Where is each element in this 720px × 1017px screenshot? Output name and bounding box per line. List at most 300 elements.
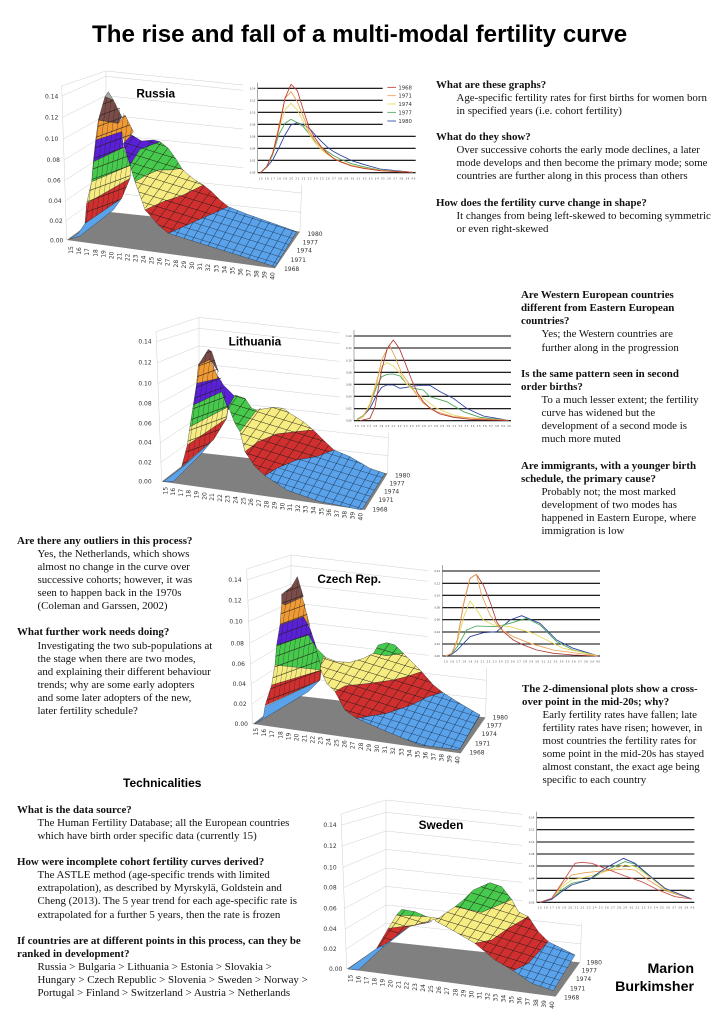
y axis labels: 0.04 xyxy=(233,681,246,688)
age axis labels: 17 xyxy=(363,976,370,984)
inset line chart: 0.02 xyxy=(434,642,440,646)
age axis labels: 31 xyxy=(382,746,389,753)
year axis labels xyxy=(564,959,602,1001)
chart: Russia xyxy=(45,71,417,280)
text block: western vs eastern Europe: immigration is low xyxy=(542,525,624,537)
inset line chart: 0.12 xyxy=(250,98,256,102)
inset line chart: 0.12 xyxy=(346,346,352,350)
text block: outliers and further work: and some later adopters of the new, xyxy=(38,692,191,704)
age axis labels: 30 xyxy=(189,262,196,269)
text block: technicalities xyxy=(17,804,308,999)
inset line chart: 0.10 xyxy=(346,358,352,362)
age axis labels: 24 xyxy=(141,255,148,263)
y axis labels: 0.14 xyxy=(323,822,337,829)
text block: what are these graphs: in specified years (i.e. cohort fertility) xyxy=(456,105,622,117)
age axis labels: 37 xyxy=(430,753,437,760)
age axis labels: 22 xyxy=(404,982,411,989)
inset line chart: 15 16 17 18 19 20 21 22 23 24 25 26 27 28 29 30 31 32 33 34 35 36 37 38 39 40 xyxy=(538,906,695,910)
inset line chart: 0.14 xyxy=(529,816,535,820)
year axis labels: 1974 xyxy=(297,248,312,255)
year axis labels: 1977 xyxy=(303,239,318,246)
legend: 1971 xyxy=(398,94,412,100)
inset line chart: 0.10 xyxy=(529,840,535,844)
y axis labels: 0.04 xyxy=(323,926,337,933)
year axis labels: 1977 xyxy=(487,722,502,729)
y axis labels: 0.08 xyxy=(47,157,60,164)
age axis labels: 27 xyxy=(444,987,451,995)
text block: what are these graphs: What are these graphs? xyxy=(436,78,546,90)
age axis labels: 22 xyxy=(309,736,316,743)
chart: Lithuania xyxy=(138,317,513,520)
age axis labels: 32 xyxy=(390,747,397,755)
floor xyxy=(253,695,486,753)
age axis labels: 35 xyxy=(318,507,325,515)
y axis labels: 0.06 xyxy=(232,661,245,668)
age axis labels: 35 xyxy=(509,996,516,1003)
country label: Czech Rep. xyxy=(317,572,381,586)
age axis labels: 28 xyxy=(264,500,271,508)
inset line chart: 0.08 xyxy=(434,606,440,610)
text block: cross-over point: The 2-dimensional plots show a cross- xyxy=(522,682,698,694)
age axis labels: 20 xyxy=(108,251,115,259)
age axis labels xyxy=(347,974,556,1009)
age axis labels: 21 xyxy=(396,981,403,988)
surface: Russia xyxy=(69,92,297,267)
age axis labels: 38 xyxy=(533,999,540,1007)
y axis labels: 0.00 xyxy=(235,721,248,728)
age axis labels: 16 xyxy=(261,729,268,736)
age axis labels: 18 xyxy=(277,731,284,739)
age axis labels: 36 xyxy=(422,751,429,759)
year axis labels: 1971 xyxy=(291,257,306,264)
text block: technicalities: extrapolated for a further 5 years, then the rate is frozen xyxy=(38,908,280,920)
text block: cross-over point: most countries the fertility rates for xyxy=(542,735,696,747)
year axis labels: 1977 xyxy=(582,967,597,974)
year axis labels: 1974 xyxy=(482,731,497,738)
age axis labels: 36 xyxy=(237,268,244,276)
text block: western vs eastern Europe: countries? xyxy=(521,315,569,327)
year axis labels: 1971 xyxy=(570,985,585,992)
age axis labels: 23 xyxy=(133,254,140,262)
inset line chart: 0.14 xyxy=(250,86,256,90)
age axis labels: 28 xyxy=(452,988,459,996)
inset line chart xyxy=(340,328,513,432)
inset line chart xyxy=(428,564,602,668)
age axis labels: 21 xyxy=(209,493,216,501)
inset line chart: 15 16 17 18 19 20 21 22 23 24 25 26 27 28 29 30 31 32 33 34 35 36 37 38 39 40 xyxy=(259,176,416,180)
country label: Russia xyxy=(136,87,176,101)
text block: technicalities: If countries are at different points in this process, can they be xyxy=(17,935,301,947)
inset line chart: 0.04 xyxy=(434,630,440,634)
y axis labels: 0.12 xyxy=(45,115,59,122)
text block: cross-over point: fertility rates have risen; however, in xyxy=(542,722,702,734)
title: The rise and fall of a multi-modal fertility curve xyxy=(92,21,627,48)
text block: western vs eastern Europe: curve has widened but the xyxy=(542,407,655,419)
age axis labels: 34 xyxy=(221,266,228,273)
text block: outliers and further work: Investigating the two sub-populations at xyxy=(38,640,212,652)
inset line chart: 0.00 xyxy=(346,419,352,423)
text block: cross-over point xyxy=(522,682,704,786)
text block: western vs eastern Europe: development of a second mode is xyxy=(542,420,687,432)
year axis labels: 1974 xyxy=(576,976,591,983)
age axis labels: 27 xyxy=(165,258,172,266)
text block: cross-over point: Early fertility rates have fallen; late xyxy=(542,709,697,721)
age axis labels: 31 xyxy=(197,263,204,270)
year axis labels: 1971 xyxy=(378,497,394,504)
age axis labels: 17 xyxy=(178,489,185,496)
text block: technicalities: The Human Fertility Database; all the European countries xyxy=(38,817,289,829)
age axis labels: 18 xyxy=(92,249,99,257)
text block: western vs eastern Europe: much more muted xyxy=(542,433,621,445)
text block: technicalities: What is the data source? xyxy=(17,804,132,816)
y axis labels: 0.06 xyxy=(323,905,337,912)
age axis labels: 33 xyxy=(398,748,405,756)
age axis labels: 40 xyxy=(357,513,364,520)
inset line chart: 0.04 xyxy=(346,394,352,398)
text block: technicalities: ranked in development? xyxy=(17,948,130,960)
age axis labels: 18 xyxy=(372,978,379,985)
age axis labels: 34 xyxy=(501,995,508,1002)
age axis labels: 20 xyxy=(293,733,300,741)
legend: 1974 xyxy=(398,102,412,108)
year axis labels: 1977 xyxy=(389,480,405,487)
age axis labels: 19 xyxy=(380,979,387,986)
inset line chart: 0.06 xyxy=(529,864,535,868)
age axis labels: 39 xyxy=(350,512,357,519)
age axis labels: 22 xyxy=(217,494,224,502)
age axis labels: 15 xyxy=(347,974,354,982)
inset line chart xyxy=(243,81,417,185)
legend: 1980 xyxy=(398,119,412,125)
age axis labels: 31 xyxy=(287,503,294,511)
age axis labels: 21 xyxy=(116,252,123,260)
text block: technicalities: which have birth order specific data (currently 15) xyxy=(38,830,257,842)
inset line chart: 0.14 xyxy=(346,334,352,338)
age axis labels: 15 xyxy=(162,487,169,494)
y axis labels: 0.10 xyxy=(45,136,59,143)
text block: what are these graphs xyxy=(436,78,711,235)
inset line chart: 0.10 xyxy=(250,110,256,114)
inset line chart: 15 16 17 18 19 20 21 22 23 24 25 26 27 28 29 30 31 32 33 34 35 36 37 38 39 40 xyxy=(444,659,600,663)
inset line chart: 0.04 xyxy=(529,876,535,880)
text block: what are these graphs: Age-specific fertility rates for first births for women born xyxy=(456,92,707,104)
text block: technicalities: Russia > Bulgaria > Lithuania > Estonia > Slovakia > xyxy=(38,961,272,973)
age axis labels: 27 xyxy=(256,499,263,507)
age axis labels: 30 xyxy=(468,990,475,998)
country label: Sweden xyxy=(419,818,463,832)
y axis labels xyxy=(45,94,64,245)
age axis labels: 29 xyxy=(460,989,467,997)
age axis labels: 34 xyxy=(311,506,318,514)
text block: cross-over point: specific to each country xyxy=(542,774,646,786)
text block: outliers and further work: seen to happen back in the 1970s xyxy=(38,587,181,599)
year axis labels xyxy=(372,472,410,513)
age axis labels: 17 xyxy=(84,248,91,256)
age axis labels: 16 xyxy=(76,247,83,255)
age axis labels: 26 xyxy=(342,740,349,748)
y axis labels: 0.00 xyxy=(50,238,64,245)
age axis labels: 28 xyxy=(173,260,180,267)
age axis labels: 40 xyxy=(270,272,277,280)
age axis labels: 32 xyxy=(484,992,491,1000)
year axis labels: 1980 xyxy=(493,714,508,721)
legend: 1968 xyxy=(398,85,412,91)
age axis labels: 29 xyxy=(272,501,279,509)
text block: what are these graphs: countries are further along in this process than others xyxy=(456,170,688,182)
text block: outliers and further work: Are there any outliers in this process? xyxy=(17,534,192,546)
y axis labels: 0.02 xyxy=(323,946,337,953)
text block: technicalities: How were incomplete cohort fertility curves derived? xyxy=(17,856,264,868)
inset line chart: 0.02 xyxy=(346,407,352,411)
text block: outliers and further work: What further work needs doing? xyxy=(17,626,169,638)
text block: outliers and further work: later fertility schedule? xyxy=(38,705,138,717)
text block: western vs eastern Europe: Is the same pattern seen in second xyxy=(521,368,679,380)
text block: what are these graphs: How does the fertility curve change in shape? xyxy=(436,197,647,209)
text block: western vs eastern Europe: schedule, the primary cause? xyxy=(521,473,656,485)
age axis labels: 38 xyxy=(254,270,261,278)
y axis labels: 0.02 xyxy=(233,701,247,708)
text block: western vs eastern Europe: To a much lesser extent; the fertility xyxy=(542,394,699,406)
year axis labels xyxy=(469,714,508,756)
text block: western vs eastern Europe: Probably not; the most marked xyxy=(542,486,676,498)
year axis labels: 1974 xyxy=(384,489,399,496)
y axis labels: 0.08 xyxy=(231,640,244,647)
inset line chart: 0.12 xyxy=(529,828,535,832)
age axis labels: 24 xyxy=(326,738,333,746)
age axis labels: 38 xyxy=(342,511,349,518)
legend: 1977 xyxy=(398,110,412,116)
age axis labels: 40 xyxy=(549,1001,556,1009)
y axis labels: 0.02 xyxy=(138,459,152,466)
age axis labels: 23 xyxy=(412,983,419,991)
y axis labels: 0.06 xyxy=(47,178,61,185)
text block: western vs eastern Europe: Are Western European countries xyxy=(521,289,674,301)
text block: outliers and further work: Yes, the Netherlands, which shows xyxy=(38,548,189,560)
year axis labels xyxy=(284,231,323,273)
age axis labels: 30 xyxy=(279,502,286,510)
y axis labels xyxy=(138,339,152,486)
y axis labels: 0.14 xyxy=(138,339,152,346)
age axis labels: 30 xyxy=(374,745,381,752)
y axis labels: 0.14 xyxy=(45,94,59,101)
inset line chart: 0.14 xyxy=(434,569,440,573)
year axis labels: 1968 xyxy=(469,749,485,756)
text block: western vs eastern Europe: Are immigrants, with a younger birth xyxy=(521,460,696,472)
y axis labels: 0.10 xyxy=(229,619,243,626)
text block: outliers and further work xyxy=(17,534,212,717)
age axis labels: 23 xyxy=(318,737,325,744)
year axis labels: 1971 xyxy=(475,740,490,747)
age axis labels: 36 xyxy=(517,997,524,1004)
age axis labels: 31 xyxy=(476,991,483,999)
text block: cross-over point: almost constant, the exact age being xyxy=(542,761,700,773)
floor xyxy=(347,942,580,997)
legend xyxy=(387,85,412,125)
age axis labels: 15 xyxy=(68,246,75,254)
age axis labels: 25 xyxy=(428,985,435,993)
age axis labels: 21 xyxy=(301,734,308,742)
floor xyxy=(67,212,300,268)
age axis labels: 35 xyxy=(229,267,236,274)
age axis labels: 25 xyxy=(240,497,247,505)
chart: Czech Rep. xyxy=(228,555,602,764)
age axis labels: 39 xyxy=(447,755,454,763)
floor xyxy=(162,453,388,510)
inset line chart: 0.06 xyxy=(434,618,440,622)
text block: western vs eastern Europe: order births? xyxy=(521,381,583,393)
age axis labels xyxy=(162,487,364,520)
age axis labels: 26 xyxy=(157,257,164,265)
inset line chart: 0.02 xyxy=(250,158,256,162)
heading: technicalities: Technicalities xyxy=(123,776,201,790)
year axis labels: 1980 xyxy=(395,472,410,479)
y axis labels xyxy=(228,577,248,728)
y axis labels: 0.12 xyxy=(323,843,337,850)
country label: Lithuania xyxy=(229,335,282,349)
text block: what are these graphs: mode develops and then become the primary mode; some xyxy=(456,157,708,169)
y axis labels: 0.14 xyxy=(228,577,242,584)
y axis labels: 0.00 xyxy=(138,479,152,486)
surface: Sweden xyxy=(348,883,575,991)
text block: western vs eastern Europe: development of two modes has xyxy=(542,499,677,511)
age axis labels: 26 xyxy=(248,498,255,506)
surface: Lithuania xyxy=(163,349,385,510)
y axis labels: 0.12 xyxy=(228,598,242,605)
inset line chart: 0.08 xyxy=(346,370,352,374)
y axis labels xyxy=(323,822,343,973)
inset line chart: 0.06 xyxy=(250,134,256,138)
inset line chart: 0.00 xyxy=(434,654,440,658)
text block: western vs eastern Europe: Yes; the Western countries are xyxy=(542,328,673,340)
text block: outliers and further work: successive cohorts; however, it was xyxy=(38,574,192,586)
author name: Marion xyxy=(647,961,694,977)
age axis labels: 26 xyxy=(436,986,443,994)
age axis labels: 19 xyxy=(285,732,292,740)
age axis labels: 29 xyxy=(366,744,373,751)
text block: western vs eastern Europe: further along in the progression xyxy=(542,342,679,354)
text block: what are these graphs: What do they show? xyxy=(436,131,531,143)
age axis labels: 34 xyxy=(406,749,413,757)
inset line chart: 0.06 xyxy=(346,382,352,386)
year axis labels: 1968 xyxy=(564,994,579,1001)
year axis labels: 1980 xyxy=(307,231,323,238)
year axis labels: 1980 xyxy=(587,959,602,966)
inset line chart: 0.04 xyxy=(250,146,256,150)
author name: Burkimsher xyxy=(615,979,694,995)
text block: what are these graphs: or even right-skewed xyxy=(456,223,548,235)
age axis labels: 35 xyxy=(414,750,421,758)
y axis labels: 0.10 xyxy=(323,864,337,871)
text block: outliers and further work: (Coleman and Garssen, 2002) xyxy=(38,600,168,612)
inset line chart: 0.08 xyxy=(529,852,535,856)
year axis labels: 1968 xyxy=(284,266,299,273)
text block: western vs eastern Europe xyxy=(521,289,699,537)
age axis labels: 16 xyxy=(355,975,362,983)
text block: technicalities: extrapolation), as described by Myrskylä, Goldstein and xyxy=(38,882,282,894)
age axis labels: 39 xyxy=(262,271,269,279)
chart: Sweden xyxy=(323,800,696,1009)
age axis labels: 33 xyxy=(303,505,310,513)
text block: cross-over point: over point in the mid-20s; why? xyxy=(522,696,669,708)
age axis labels: 38 xyxy=(439,754,446,761)
text block: outliers and further work: and explaining their different behaviour xyxy=(38,666,211,678)
text block: western vs eastern Europe: different from Eastern European xyxy=(521,302,674,314)
age axis labels: 18 xyxy=(186,490,193,497)
age axis labels: 32 xyxy=(295,504,302,512)
surface: Czech Rep. xyxy=(255,577,480,750)
text block: technicalities: Hungary > Czech Republic > Slovenia > Sweden > Norway > xyxy=(38,974,308,986)
text block: what are these graphs: It changes from being left-skewed to becoming symmetric xyxy=(456,210,711,222)
age axis labels: 23 xyxy=(225,495,232,503)
age axis labels xyxy=(68,246,277,280)
age axis labels: 37 xyxy=(334,510,341,517)
age axis labels: 20 xyxy=(388,980,395,987)
year axis labels: 1968 xyxy=(372,506,388,513)
text block: what are these graphs: Over successive cohorts the early mode declines, a later xyxy=(456,144,700,156)
inset line chart: 0.12 xyxy=(434,581,440,585)
age axis labels: 20 xyxy=(201,492,208,500)
age axis labels: 37 xyxy=(245,269,252,277)
age axis labels: 19 xyxy=(100,250,107,258)
inset line chart: 15 16 17 18 19 20 21 22 23 24 25 26 27 28 29 30 31 32 33 34 35 36 37 38 39 40 xyxy=(355,424,511,428)
author name xyxy=(615,961,694,995)
text block: technicalities: Portugal > Finland > Switzerland > Austria > Netherlands xyxy=(38,987,290,999)
text block: outliers and further work: the stage when there are two modes, xyxy=(38,653,196,665)
age axis labels: 33 xyxy=(493,994,500,1001)
y axis labels: 0.00 xyxy=(329,966,343,973)
y axis labels: 0.06 xyxy=(138,420,152,427)
age axis labels: 16 xyxy=(170,488,177,495)
y axis labels: 0.04 xyxy=(138,440,152,447)
y axis labels: 0.08 xyxy=(323,885,337,892)
age axis labels: 37 xyxy=(525,998,532,1005)
age axis labels: 40 xyxy=(455,756,462,764)
y axis labels: 0.12 xyxy=(138,360,152,367)
inset line chart: 0.02 xyxy=(529,888,535,892)
text block: technicalities: Cheng (2013). The 5 year trend for each age-specific rate is xyxy=(38,895,297,907)
age axis labels: 19 xyxy=(194,491,201,498)
age axis labels: 25 xyxy=(149,256,156,264)
inset line chart: 0.00 xyxy=(250,171,256,175)
y axis labels: 0.10 xyxy=(138,380,152,387)
age axis labels xyxy=(253,728,462,764)
age axis labels: 24 xyxy=(420,984,427,992)
age axis labels: 15 xyxy=(253,728,260,735)
y axis labels: 0.02 xyxy=(49,218,63,225)
age axis labels: 27 xyxy=(350,741,357,749)
age axis labels: 36 xyxy=(326,509,333,516)
inset line chart: 0.00 xyxy=(529,900,535,904)
inset line chart: 0.08 xyxy=(250,122,256,126)
y axis labels: 0.04 xyxy=(48,198,62,205)
age axis labels: 25 xyxy=(334,739,341,747)
age axis labels: 32 xyxy=(205,264,212,271)
y axis labels: 0.08 xyxy=(138,400,152,407)
age axis labels: 24 xyxy=(233,496,240,504)
text block: outliers and further work: trends; why are some early adopters xyxy=(38,679,194,691)
text block: technicalities: The ASTLE method (age-specific trends with limited xyxy=(38,869,270,881)
inset line chart xyxy=(522,810,696,913)
text block: western vs eastern Europe: happened in Eastern Europe, where xyxy=(542,512,696,524)
age axis labels: 33 xyxy=(213,265,220,272)
text block: outliers and further work: almost no change in the curve over xyxy=(38,561,190,573)
age axis labels: 17 xyxy=(269,730,276,738)
age axis labels: 22 xyxy=(124,253,131,261)
text block: cross-over point: some point in the mid-20s has stayed xyxy=(542,748,704,760)
age axis labels: 39 xyxy=(541,1000,548,1008)
inset line chart: 0.10 xyxy=(434,593,440,597)
age axis labels: 29 xyxy=(181,261,188,268)
